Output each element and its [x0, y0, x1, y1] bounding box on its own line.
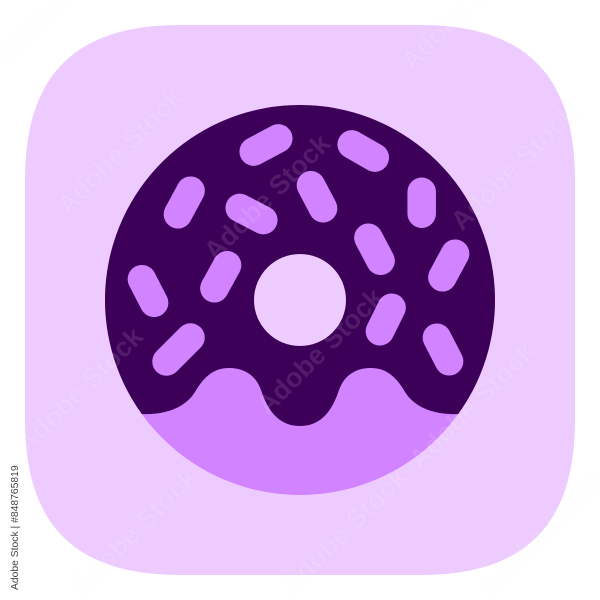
donut hole — [254, 254, 346, 346]
donut base — [105, 105, 495, 495]
watermark text: Adobe Stock — [251, 282, 390, 420]
watermark text: Adobe Stock — [198, 128, 337, 266]
watermark text: Adobe Stock — [275, 462, 414, 600]
watermark text: Adobe Stock — [403, 336, 542, 474]
watermark text: Adobe Stock — [65, 462, 204, 600]
stock id caption: Adobe Stock | #848765819 — [10, 465, 21, 590]
watermark text: Adobe Stock — [11, 321, 150, 459]
chocolate icing with drips — [105, 105, 495, 426]
sprinkles — [142, 138, 455, 362]
watermark text: Adobe Stock — [51, 82, 190, 220]
watermark text: Adobe Stock — [445, 98, 584, 236]
donut icon — [105, 105, 495, 495]
